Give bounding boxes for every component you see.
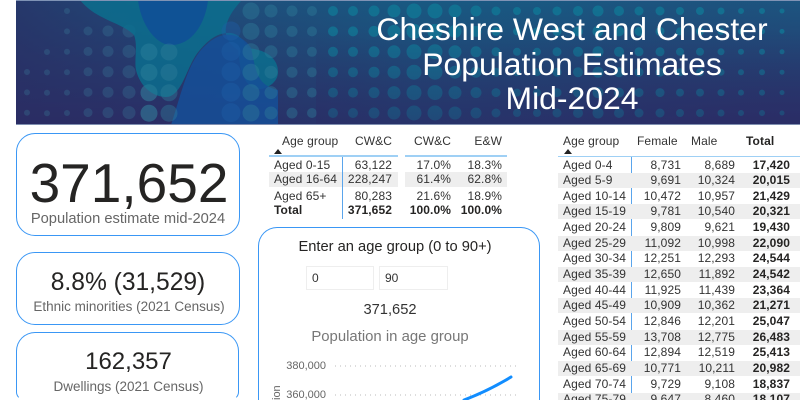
table: broad age groups: Aged 65+ — [274, 189, 327, 203]
calculator heading: Enter an age group (0 to 90+) — [298, 239, 492, 255]
table: five-year age bands: Aged 30-34 — [563, 251, 626, 265]
table: five-year age bands: Aged 5-9 — [563, 173, 613, 187]
table: five-year age bands: 20,982 — [753, 361, 790, 375]
table: five-year age bands: 26,483 — [753, 330, 790, 344]
table: broad age groups: Aged 16-64 — [274, 172, 337, 186]
table: five-year age bands: 9,729 — [650, 377, 681, 391]
table: five-year age bands: 11,892 — [699, 267, 735, 281]
table: broad age groups: CW&C — [414, 134, 451, 148]
table: five-year age bands: 10,324 — [698, 173, 735, 187]
ethnic minorities value: 8.8% (31,529) — [51, 269, 205, 296]
table: five-year age bands: 12,775 — [698, 330, 735, 344]
table: five-year age bands: 24,544 — [753, 251, 790, 265]
input: to age: 90 — [385, 271, 398, 285]
table: broad age groups: Total — [274, 203, 302, 217]
table: five-year age bands: 17,420 — [753, 158, 790, 172]
table: five-year age bands: 9,691 — [650, 173, 681, 187]
input: from age — [306, 266, 374, 290]
table: five-year age bands: 10,211 — [699, 361, 735, 375]
table: five-year age bands: 10,998 — [698, 236, 735, 250]
table: broad age groups: E&W — [474, 134, 502, 148]
title: Cheshire West and Chester — [376, 11, 768, 47]
table: broad age groups: 80,283 — [355, 189, 392, 203]
table: broad age groups: 21.6% — [416, 189, 451, 203]
table: five-year age bands: Aged 45-49 — [563, 298, 626, 312]
table: broad age groups: 61.4% — [416, 172, 451, 186]
title: Mid-2024 — [506, 80, 638, 116]
table: five-year age bands: 9,781 — [650, 204, 681, 218]
table: five-year age bands: 25,413 — [753, 345, 790, 359]
card caption: Population estimate mid-2024 — [31, 211, 225, 227]
table: five-year age bands: 8,689 — [704, 158, 735, 172]
table: five-year age bands: 12,894 — [644, 345, 681, 359]
table: five-year age bands: Aged 60-64 — [563, 345, 626, 359]
table: five-year age bands: Aged 10-14 — [563, 189, 626, 203]
table: broad age groups: 228,247 — [348, 172, 392, 186]
table: five-year age bands: 10,472 — [644, 189, 681, 203]
table: broad age groups: 18.3% — [467, 158, 502, 172]
table: five-year age bands: Aged 40-44 — [563, 283, 626, 297]
table: five-year age bands: Aged 50-54 — [563, 314, 626, 328]
table: five-year age bands: 12,201 — [698, 314, 735, 328]
table: broad age groups: Age group — [282, 134, 338, 148]
table: broad age groups — [269, 134, 507, 219]
table: five-year age bands: Age group — [563, 134, 619, 148]
table: five-year age bands: 9,621 — [704, 220, 735, 234]
line chart: population in age group — [271, 360, 516, 400]
table: five-year age bands: 22,090 — [753, 236, 790, 250]
table: five-year age bands: Aged 15-19 — [563, 204, 626, 218]
table: five-year age bands: 9,108 — [704, 377, 735, 391]
dwellings caption: Dwellings (2021 Census) — [53, 379, 204, 394]
table: five-year age bands: Female — [637, 134, 678, 148]
table: five-year age bands: 25,047 — [753, 314, 790, 328]
table: five-year age bands: 13,708 — [644, 330, 681, 344]
table: five-year age bands: 10,909 — [644, 298, 681, 312]
table: five-year age bands: Aged 55-59 — [563, 330, 626, 344]
table: five-year age bands: 9,809 — [650, 220, 681, 234]
table: five-year age bands: 21,271 — [753, 298, 790, 312]
banner — [16, 0, 800, 125]
table: five-year age bands: 12,251 — [644, 251, 681, 265]
table: five-year age bands: Aged 20-24 — [563, 220, 626, 234]
table: five-year age bands: Aged 35-39 — [563, 267, 626, 281]
table: broad age groups: 100.0% — [410, 203, 451, 217]
table: broad age groups: 17.0% — [416, 158, 451, 172]
table: five-year age bands: 12,519 — [698, 345, 735, 359]
card: dwellings — [16, 332, 239, 400]
table: five-year age bands: 21,429 — [753, 189, 790, 203]
table: five-year age bands: 12,846 — [644, 314, 681, 328]
dwellings value: 162,357 — [85, 348, 172, 375]
table: broad age groups: 18.9% — [467, 189, 502, 203]
table: five-year age bands: 19,430 — [753, 220, 790, 234]
table: five-year age bands: 20,015 — [753, 173, 790, 187]
table: broad age groups: CW&C — [355, 134, 392, 148]
table: broad age groups: 100.0% — [461, 203, 502, 217]
table: five-year age bands: 24,542 — [753, 267, 790, 281]
ethnic minorities caption: Ethnic minorities (2021 Census) — [33, 299, 225, 314]
table: five-year age bands: Aged 65-69 — [563, 361, 626, 375]
table: five-year age bands: 12,650 — [644, 267, 681, 281]
input: to age — [379, 266, 448, 290]
table: broad age groups: 63,122 — [355, 158, 392, 172]
table: five-year age bands: 10,771 — [644, 361, 681, 375]
table: five-year age bands: 20,321 — [753, 204, 790, 218]
table: five-year age bands: Total — [746, 134, 774, 148]
calculator result: 371,652 — [363, 302, 417, 318]
card: population estimate — [16, 133, 240, 236]
table: five-year age bands: 10,957 — [698, 189, 735, 203]
title: Population Estimates — [422, 46, 722, 82]
table: five-year age bands: Male — [691, 134, 717, 148]
table: broad age groups: 62.8% — [467, 172, 502, 186]
card: ethnic minorities — [16, 252, 240, 325]
table: broad age groups: 371,652 — [348, 203, 392, 217]
table: five-year age bands: Aged 0-4 — [563, 158, 613, 172]
line chart: population in age group: ion — [271, 385, 283, 400]
line chart: population in age group: 380,000 — [286, 360, 326, 372]
table: five-year age bands: 12,293 — [698, 251, 735, 265]
table: five-year age bands: 23,364 — [753, 283, 790, 297]
table: five-year age bands: Aged 25-29 — [563, 236, 626, 250]
table: five-year age bands — [558, 134, 800, 400]
big number: 371,652 — [30, 152, 228, 214]
table: five-year age bands: 18,837 — [753, 377, 790, 391]
table: five-year age bands: Aged 70-74 — [563, 377, 626, 391]
table: five-year age bands: 10,540 — [698, 204, 735, 218]
table: five-year age bands: 11,092 — [645, 236, 681, 250]
input: from age: 0 — [312, 271, 319, 285]
title — [376, 11, 768, 116]
panel: age group calculator — [258, 227, 540, 400]
table: five-year age bands: 11,439 — [699, 283, 735, 297]
chart title: Population in age group — [311, 329, 469, 345]
table: broad age groups: Aged 0-15 — [274, 158, 330, 172]
table: five-year age bands: 8,731 — [650, 158, 681, 172]
table: five-year age bands: 11,925 — [645, 283, 681, 297]
table: five-year age bands: 10,362 — [698, 298, 735, 312]
